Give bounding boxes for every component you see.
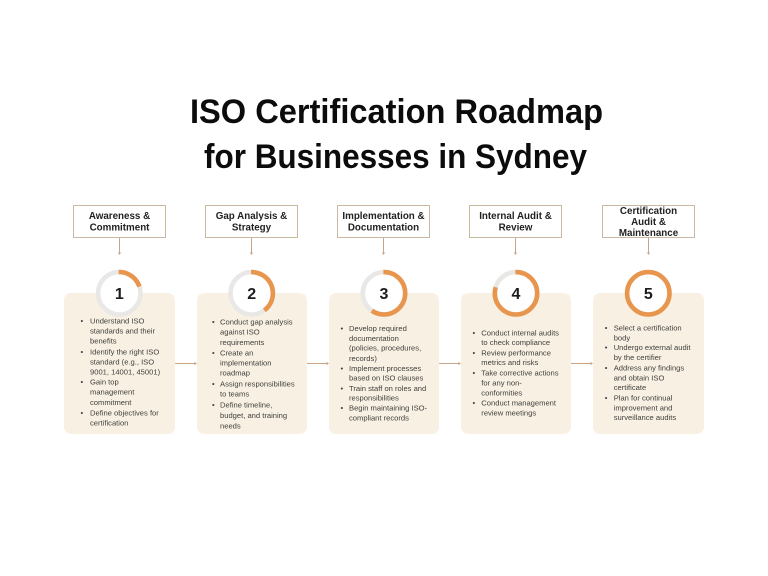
bullet list: step 3: • bbox=[340, 404, 344, 413]
bullet list: step 2: Create an bbox=[220, 348, 253, 357]
arrow: step 3 to step 4 bbox=[439, 362, 461, 365]
bullet list: step 5: Plan for continual bbox=[614, 393, 673, 402]
arrow: heading to ring 1 bbox=[118, 238, 121, 255]
bullet list: step 4: conformities bbox=[481, 388, 522, 397]
bullet list: step 5: • bbox=[605, 393, 608, 402]
title: ISO Certification Roadmap bbox=[190, 93, 603, 131]
arrow: step 2 to step 3 bbox=[307, 362, 329, 365]
bullet list: step 4: • bbox=[472, 368, 476, 377]
bullet list: step 4 bbox=[472, 328, 559, 418]
bullet list: step 5: • bbox=[605, 343, 608, 352]
heading box: Gap Analysis & Strategy bbox=[206, 206, 298, 238]
arrow: step 1 to step 2 bbox=[175, 362, 197, 365]
bullet list: step 2: roadmap bbox=[220, 369, 250, 378]
bullet list: step 5: Undergo external audit bbox=[614, 343, 691, 352]
bullet list: step 5: by the certifier bbox=[614, 353, 662, 362]
heading box: Internal Audit & Review: Review bbox=[499, 222, 533, 233]
bullet list: step 1: • bbox=[80, 378, 84, 387]
bullet list: step 2: Conduct gap analysis bbox=[220, 317, 293, 326]
bullet list: step 5: • bbox=[605, 364, 608, 373]
arrow: heading to ring 2 bbox=[250, 238, 253, 255]
bullet list: step 3: based on ISO clauses bbox=[349, 374, 423, 383]
heading box: Awareness & Commitment: Awareness & bbox=[89, 211, 150, 222]
arrow: step 4 to step 5 bbox=[571, 362, 593, 365]
bullet list: step 4: Review performance bbox=[481, 348, 551, 357]
panel: step 3 implementation and documentation bbox=[329, 206, 439, 434]
bullet list: step 3: responsibilities bbox=[349, 394, 399, 403]
bullet list: step 1: Gain top bbox=[90, 378, 119, 387]
progress ring: step 2: 2 bbox=[247, 286, 256, 303]
bullet list: step 3: Train staff on roles and bbox=[349, 384, 426, 393]
progress ring: step 1 bbox=[98, 272, 140, 314]
bullet list: step 4: Conduct internal audits bbox=[481, 328, 559, 337]
bullet list: step 5: • bbox=[605, 323, 608, 332]
bullet list: step 2: needs bbox=[220, 421, 241, 430]
bullet list: step 4: metrics and risks bbox=[481, 358, 538, 367]
bullet list: step 3: Begin maintaining ISO- bbox=[349, 404, 428, 413]
bullet list: step 5: body bbox=[614, 334, 630, 343]
bullet list: step 5: improvement and bbox=[614, 403, 672, 412]
bullet list: step 2: • bbox=[212, 317, 215, 326]
heading box: Certification Audit & Maintenance bbox=[602, 206, 694, 239]
progress ring: step 3: 3 bbox=[380, 286, 389, 303]
progress ring: step 5 bbox=[627, 272, 670, 314]
arrow: heading to ring 4 bbox=[514, 238, 517, 255]
heading box: Gap Analysis & Strategy: Strategy bbox=[232, 222, 272, 233]
bullet list: step 1: certification bbox=[90, 418, 128, 427]
heading box: Certification Audit & Maintenance: Maintenance bbox=[619, 228, 679, 239]
card: step 2 bbox=[197, 293, 307, 434]
progress ring: step 5: 5 bbox=[644, 286, 653, 303]
panel: step 5 certification audit and maintenance bbox=[593, 206, 704, 434]
progress ring: step 4: 4 bbox=[512, 286, 521, 303]
panel: step 2 gap analysis and strategy bbox=[197, 206, 307, 434]
heading box: Internal Audit & Review bbox=[470, 206, 562, 238]
bullet list: step 4: Take corrective actions bbox=[481, 368, 559, 377]
bullet list: step 5: Address any findings bbox=[614, 364, 684, 373]
title: for Businesses in Sydney bbox=[204, 138, 587, 176]
bullet list: step 1: Identify the right ISO bbox=[90, 347, 159, 356]
heading box: Awareness & Commitment bbox=[74, 206, 166, 238]
bullet list: step 3: documentation bbox=[349, 334, 399, 343]
panel: step 4 internal audit and review bbox=[461, 206, 571, 434]
title bbox=[190, 93, 603, 176]
bullet list: step 2: Assign responsibilities bbox=[220, 379, 295, 388]
bullet list: step 2: implementation bbox=[220, 358, 272, 367]
bullet list: step 5: and obtain ISO bbox=[614, 373, 664, 382]
bullet list: step 1: • bbox=[80, 408, 84, 417]
progress ring: step 1: 1 bbox=[115, 286, 124, 303]
panel: step 1 awareness and commitment bbox=[64, 206, 175, 434]
bullet list: step 2: • bbox=[212, 379, 215, 388]
card: step 4 bbox=[461, 293, 571, 434]
progress ring: step 4 bbox=[495, 272, 537, 314]
bullet list: step 3: • bbox=[340, 364, 344, 373]
bullet list: step 3: Implement processes bbox=[349, 364, 421, 373]
heading box: Implementation & Documentation bbox=[338, 206, 430, 238]
bullet list: step 3: • bbox=[340, 384, 344, 393]
heading box: Gap Analysis & Strategy: Gap Analysis & bbox=[216, 211, 287, 222]
bullet list: step 2: budget, and training bbox=[220, 411, 287, 420]
bullet list: step 2: • bbox=[212, 401, 215, 410]
arrow: heading to ring 5 bbox=[647, 238, 650, 255]
bullet list: step 3: records) bbox=[349, 354, 377, 363]
bullet list: step 1: Define objectives for bbox=[90, 408, 159, 417]
bullet list: step 5: surveillance audits bbox=[614, 413, 676, 422]
bullet list: step 2: against ISO bbox=[220, 328, 260, 337]
heading box: Certification Audit & Maintenance: Certification bbox=[620, 206, 677, 217]
bullet list: step 1: standard (e.g., ISO bbox=[90, 357, 154, 366]
bullet list: step 1: commitment bbox=[90, 398, 132, 407]
bullet list: step 2: • bbox=[212, 348, 215, 357]
bullet list: step 3: compliant records bbox=[349, 414, 409, 423]
bullet list: step 1: standards and their bbox=[90, 327, 155, 336]
heading box: Certification Audit & Maintenance: Audit & bbox=[631, 217, 666, 228]
bullet list: step 2: to teams bbox=[220, 390, 249, 399]
bullet list: step 4: • bbox=[472, 348, 476, 357]
heading box: Implementation & Documentation: Implementation & bbox=[342, 211, 425, 222]
bullet list: step 4: review meetings bbox=[481, 409, 536, 418]
heading box: Awareness & Commitment: Commitment bbox=[90, 222, 150, 233]
bullet list: step 5: certificate bbox=[614, 383, 646, 392]
bullet list: step 4: to check compliance bbox=[481, 338, 550, 347]
bullet list: step 3: • bbox=[340, 324, 344, 333]
bullet list: step 4: • bbox=[472, 398, 476, 407]
card: step 1 bbox=[64, 293, 175, 434]
bullet list: step 2: requirements bbox=[220, 338, 265, 347]
bullet list: step 1: Understand ISO bbox=[90, 316, 145, 325]
bullet list: step 1: • bbox=[80, 316, 84, 325]
bullet list: step 5 bbox=[605, 323, 691, 422]
progress ring: step 3 bbox=[363, 272, 405, 314]
bullet list: step 4: for any non- bbox=[481, 378, 522, 387]
bullet list: step 5: Select a certification bbox=[614, 323, 682, 332]
bullet list: step 3 bbox=[340, 324, 428, 423]
bullet list: step 4: Conduct management bbox=[481, 398, 557, 407]
bullet list: step 3: Develop required bbox=[349, 324, 407, 333]
bullet list: step 4: • bbox=[472, 328, 476, 337]
bullet list: step 1: management bbox=[90, 388, 135, 397]
bullet list: step 1: • bbox=[80, 347, 84, 356]
bullet list: step 2 bbox=[212, 317, 295, 430]
bullet list: step 1 bbox=[80, 316, 161, 427]
bullet list: step 3: (policies, procedures, bbox=[349, 344, 421, 353]
card: step 3 bbox=[329, 293, 439, 434]
bullet list: step 2: Define timeline, bbox=[220, 401, 272, 410]
card: step 5 bbox=[593, 293, 704, 434]
heading box: Internal Audit & Review: Internal Audit & bbox=[479, 211, 552, 222]
heading box: Implementation & Documentation: Documentation bbox=[348, 222, 419, 233]
bullet list: step 1: benefits bbox=[90, 337, 117, 346]
progress ring: step 2 bbox=[230, 272, 273, 314]
bullet list: step 1: 9001, 14001, 45001) bbox=[90, 367, 161, 376]
arrow: heading to ring 3 bbox=[382, 238, 385, 255]
